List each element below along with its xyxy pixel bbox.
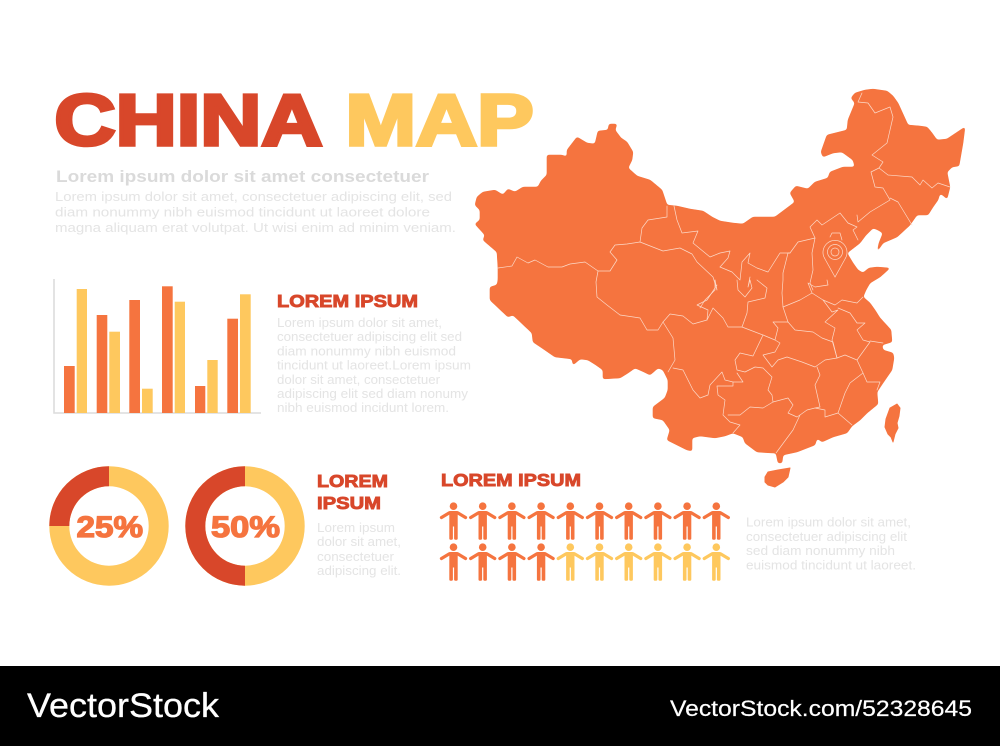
- map of China: [475, 89, 965, 487]
- map: Taiwan: [885, 404, 900, 442]
- intro text block: Lorem ipsum dolor sit amet consectetuer: [56, 168, 430, 186]
- bar chart text: diam nonummy nibh euismod: [277, 344, 456, 358]
- donut text: consectetuer: [317, 550, 394, 564]
- map: mainland silhouette: [475, 89, 965, 463]
- intro text block: [55, 168, 456, 235]
- icon: map pin: [823, 240, 847, 277]
- donut chart: 50%: 50%: [211, 511, 280, 544]
- bar chart text: consectetuer adipiscing elit sed: [277, 330, 462, 344]
- people heading: LOREM IPSUM: [441, 470, 581, 490]
- intro text block: Lorem ipsum dolor sit amet, consectetuer adipiscing elit, sed: [55, 190, 452, 204]
- watermark bar: [0, 666, 1000, 746]
- bar chart text: tincidunt ut laoreet.Lorem ipsum: [277, 358, 471, 372]
- title: [54, 81, 534, 161]
- donut text: adipiscing elit.: [317, 564, 401, 578]
- pictogram: people: [442, 502, 728, 581]
- intro text block: magna aliquam erat volutpat. Ut wisi enim ad minim veniam.: [55, 221, 456, 235]
- people text: [746, 516, 916, 572]
- bar chart text: dolor sit amet, consectetuer: [277, 373, 440, 387]
- donut text: [317, 471, 401, 578]
- bar chart text: Lorem ipsum dolor sit amet,: [277, 316, 442, 330]
- title: MAP: [346, 81, 534, 161]
- donut text: LOREM: [317, 471, 388, 491]
- bar chart text: adipiscing elit sed diam nonumy: [277, 387, 469, 401]
- donut chart: 50%: [195, 476, 295, 576]
- donut text: dolor sit amet,: [317, 535, 401, 549]
- intro text block: diam nonummy nibh euismod tincidunt ut laoreet dolore: [55, 206, 430, 220]
- watermark bar: VectorStock.com/52328645: [670, 696, 972, 721]
- bar chart text: [277, 291, 471, 415]
- people text: sed diam nonummy nibh: [746, 544, 895, 558]
- map: Hainan: [765, 468, 790, 487]
- people text: Lorem ipsum dolor sit amet,: [746, 516, 911, 530]
- donut text: Lorem ipsum: [317, 521, 395, 535]
- map: province borders: [498, 93, 950, 453]
- donut text: IPSUM: [317, 493, 381, 513]
- donut chart: 25%: 25%: [76, 511, 143, 544]
- bar chart text: nibh euismod incidunt lorem.: [277, 401, 449, 415]
- watermark bar: VectorStock: [27, 687, 220, 725]
- bar chart: [54, 279, 261, 413]
- bar chart text: LOREM IPSUM: [277, 291, 418, 311]
- donut chart: 25%: [59, 476, 159, 576]
- title: CHINA: [54, 81, 322, 161]
- people text: euismod tincidunt ut laoreet.: [746, 558, 916, 572]
- people text: consectetuer adipiscing elit: [746, 530, 908, 544]
